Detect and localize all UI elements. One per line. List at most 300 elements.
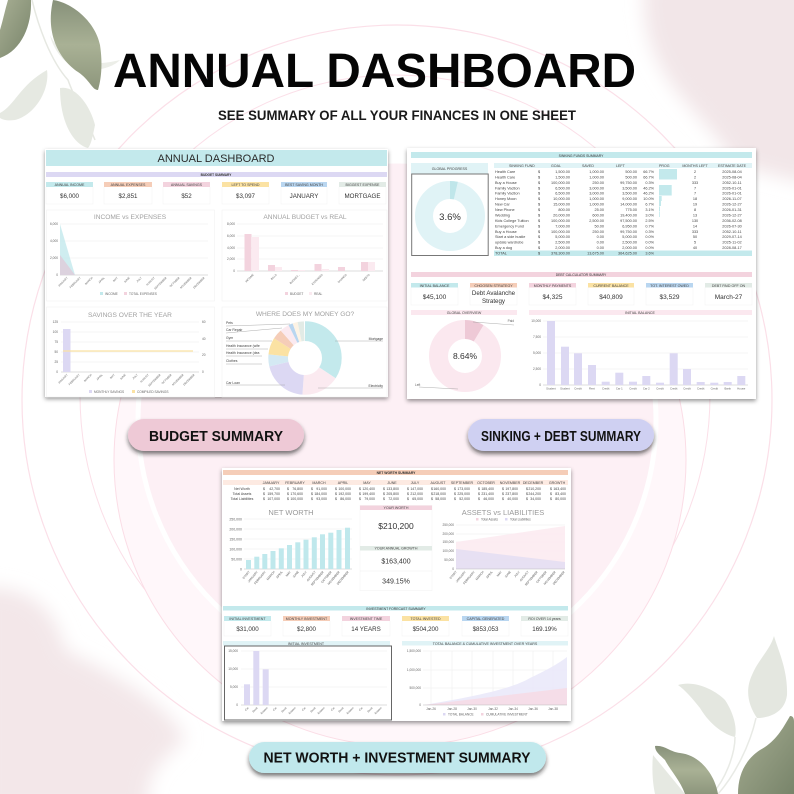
initial balance bar chart: INITIAL BALANCE	[625, 311, 656, 315]
sinking funds table: SINKING FUND	[509, 164, 535, 168]
sinking funds table: 500.00	[625, 170, 637, 174]
net worth table: Total Assets	[233, 492, 252, 496]
chart: net worth: OCTOBER	[320, 569, 333, 584]
sinking funds table: 2026-12-27	[722, 213, 742, 217]
sinking funds table: $	[538, 224, 541, 228]
sinking funds table: Wedding	[495, 213, 510, 217]
net worth table: 225,000	[457, 492, 470, 496]
sinking funds table: 1,000.00	[589, 203, 604, 207]
net worth table: 52,000	[459, 497, 470, 501]
your worth cards	[360, 506, 432, 590]
sinking funds table: LEFT	[616, 164, 626, 168]
chart: income vs expenses	[46, 210, 214, 301]
chart: total balance and cumulative investment: Jan-36	[528, 707, 538, 711]
chart: where does my money go: Pets	[226, 321, 233, 325]
chart: savings over the year: MAY	[109, 373, 116, 380]
sinking funds table: 19	[693, 203, 697, 207]
net worth table: 205,800	[386, 492, 399, 496]
chart: where does my money go: Clothes	[226, 359, 238, 363]
chart: initial investment: Stock	[251, 705, 259, 713]
dashboard heading: ANNUAL DASHBOARD	[158, 153, 275, 165]
sinking funds table: $	[538, 181, 541, 185]
budget summary strip: BUDGET SUMMARY	[201, 173, 232, 177]
chart: net worth: 200,000	[229, 528, 242, 532]
chart: total balance and cumulative investment: 1,500,000	[407, 649, 421, 653]
kpi cards: LEFT TO SPEND	[232, 183, 260, 187]
kpi cards	[46, 182, 386, 204]
net worth table: JULY	[411, 481, 420, 485]
sinking funds table: 18	[693, 197, 697, 201]
sinking funds table: $	[538, 203, 541, 207]
chart: income vs expenses: AUGUST	[145, 276, 156, 287]
sinking funds table: 66.7%	[643, 170, 655, 174]
net worth table: 76,800	[292, 487, 303, 491]
sinking funds table: 7,000.00	[555, 224, 570, 228]
sinking funds table: 2,000.00	[622, 246, 637, 250]
sinking funds table: 40	[693, 246, 697, 250]
net worth table: $$$$$$$$$$$$$	[263, 492, 552, 496]
sinking funds strip	[411, 152, 752, 158]
chart: total balance and cumulative investment: 0	[419, 703, 421, 707]
sinking funds table: $	[538, 197, 541, 201]
initial balance bar chart: 2,500	[533, 367, 541, 371]
net worth table: 83,400	[555, 492, 566, 496]
sinking funds table: $	[538, 175, 541, 179]
sinking funds table: $	[538, 252, 541, 256]
net worth table: OCTOBER	[477, 481, 495, 485]
debt calculator strip: DEBT CALCULATOR SUMMARY	[556, 273, 607, 277]
chart: income vs expenses: JANUARY	[57, 276, 69, 288]
chart: savings over the year: OCTOBER	[161, 373, 173, 385]
sinking funds table: 6,500.00	[555, 186, 570, 190]
sinking funds table: 3.6%	[645, 252, 655, 256]
chart: where does my money go: Car Repair	[226, 328, 243, 332]
initial balance bar chart: Credit	[697, 386, 705, 390]
sinking funds table: 333	[692, 230, 698, 234]
chart: annual budget vs real: INCOME	[244, 273, 255, 283]
chart: total balance and cumulative investment	[402, 641, 568, 716]
sinking funds table: 3,000.00	[589, 186, 604, 190]
initial balance bar chart: Car 2	[643, 386, 650, 390]
sinking funds table: 2,500.00	[622, 241, 637, 245]
kpi cards: $6,000	[60, 193, 80, 200]
sinking funds table: 5,000.00	[555, 235, 570, 239]
chart: income vs expenses: FEBRUARY	[69, 276, 82, 289]
investment kpi cards: MONTHLY INVESTMENT	[286, 617, 328, 621]
net worth strip: NET WORTH SUMMARY	[377, 471, 416, 475]
chart: assets vs liabilities: SEPTEMBER	[524, 569, 539, 587]
chart: assets vs liabilities: Total Liabilities	[510, 518, 531, 522]
sinking funds table: TOTAL	[495, 252, 507, 256]
net worth table: MARCH	[312, 481, 326, 485]
initial balance bar chart: 0	[539, 383, 541, 387]
sinking funds table: 2	[694, 170, 696, 174]
net worth table: 65,000	[412, 497, 423, 501]
sinking funds strip: SINKING FUNDS SUMMARY	[559, 154, 604, 158]
sinking funds table: 500.00	[625, 175, 637, 179]
chart: net worth: 50,000	[231, 558, 242, 562]
chart: savings over the year: 20	[202, 353, 206, 357]
sinking funds table: $	[538, 214, 541, 218]
sinking funds table: 2052-10-11	[722, 230, 742, 234]
investment kpi cards: $504,200	[413, 626, 439, 633]
net worth table: 147,000	[410, 487, 423, 491]
chart: where does my money go: Mortgage	[369, 337, 383, 341]
kpi cards: $52	[181, 193, 192, 200]
net worth table: GROWTH	[549, 481, 566, 485]
debt kpi cards: TOT. INTEREST OWED	[650, 284, 689, 288]
sinking funds table: 25.00	[594, 208, 604, 212]
chart: initial investment: Estates	[317, 705, 326, 715]
net worth table: Net Worth	[234, 487, 250, 491]
net worth table: 80,000	[555, 497, 566, 501]
sinking funds table: 2	[694, 175, 696, 179]
global overview donut: Paid	[508, 319, 514, 323]
chart: income vs expenses: 2,000	[50, 256, 58, 260]
sinking funds table: 100,000.00	[551, 230, 570, 234]
chart: annual budget vs real: SAVINGS	[337, 273, 348, 284]
net worth table: 218,000	[433, 492, 446, 496]
sinking funds table: 46.2%	[643, 192, 655, 196]
sinking funds table: New Phone	[495, 208, 515, 212]
panel: sinking funds and debt	[407, 148, 756, 399]
sinking funds table: 100,000.00	[551, 219, 570, 223]
sinking funds table: 10.0%	[643, 197, 655, 201]
global overview donut: GLOBAL OVERVIEW	[447, 311, 482, 315]
sinking funds table: 13	[693, 213, 697, 217]
chart: total balance and cumulative investment: Jan-28	[447, 707, 457, 711]
chart: savings over the year: SAVINGS OVER THE YEAR	[88, 312, 172, 319]
sinking funds table: 0.3%	[645, 181, 655, 185]
sinking funds table: 5,000.00	[622, 235, 637, 239]
sinking funds table: 364,625.00	[618, 252, 637, 256]
investment kpi cards: INVESTMENT TIME	[350, 617, 383, 621]
sinking funds table: 9,000.00	[622, 197, 637, 201]
sinking funds table: 333	[692, 181, 698, 185]
sinking funds table: 6.7%	[645, 203, 655, 207]
chart: initial investment: Estates	[374, 705, 383, 715]
debt kpi cards: Strategy	[482, 298, 506, 305]
initial balance bar chart: House	[737, 386, 746, 390]
chart: savings over the year: 0	[56, 370, 58, 374]
sinking funds table: 46.2%	[643, 186, 655, 190]
chart: income vs expenses: JUNE	[123, 276, 131, 284]
chart: assets vs liabilities: Total Assets	[481, 518, 498, 522]
your worth cards: YOUR WORTH	[384, 506, 409, 510]
chart: initial investment: Car	[330, 706, 336, 712]
chart: assets vs liabilities: 250,000	[442, 523, 454, 527]
sinking funds table: 10,000.00	[553, 197, 570, 201]
title: ANNUAL DASHBOARD	[113, 45, 636, 98]
net worth table: APRIL	[338, 481, 348, 485]
net worth table: 210,200	[528, 487, 541, 491]
panel: budget summary dashboard	[45, 149, 388, 397]
chart: assets vs liabilities: NOVEMBER	[543, 569, 557, 586]
chart: savings over the year	[46, 307, 214, 397]
chart: assets vs liabilities	[442, 508, 566, 587]
sinking funds table: 2025-08-04	[722, 170, 742, 174]
net worth table: 173,000	[457, 487, 470, 491]
net worth table: 72,000	[388, 497, 399, 501]
chart: assets vs liabilities: APRIL	[485, 570, 494, 579]
chart: savings over the year: 50	[54, 350, 58, 354]
sinking funds table: 2,500.00	[555, 241, 570, 245]
net worth table: 163,400	[553, 487, 566, 491]
net worth table: Total Liabilities	[231, 497, 254, 501]
sinking funds table: Emergency Fund	[495, 224, 524, 228]
chart: net worth: 250,000	[229, 518, 242, 522]
kpi cards: BEST SAVING MONTH	[285, 183, 323, 187]
sinking funds table: 2026-01-01	[722, 186, 742, 190]
chart: annual budget vs real: ANNUAL BUDGET vs REAL	[263, 214, 347, 221]
chart: assets vs liabilities: MARCH	[475, 570, 485, 581]
debt kpi cards: DEBT PAID OFF ON	[712, 284, 746, 288]
investment kpi cards: $2,800	[297, 626, 317, 633]
initial balance bar chart: Credit	[629, 386, 637, 390]
sinking funds table: Kids College Tuition	[495, 219, 529, 223]
global progress donut	[411, 163, 488, 256]
sinking funds table: ESTIMATE DATE	[718, 164, 747, 168]
initial balance bar chart: 5,000	[533, 351, 541, 355]
chart: income vs expenses: 0	[56, 273, 58, 277]
sinking funds table: 2025-08-04	[722, 175, 742, 179]
kpi cards: ANNUAL INCOME	[55, 183, 85, 187]
sinking funds table: 5	[694, 241, 696, 245]
net worth table: NOVEMBER	[500, 481, 521, 485]
sinking funds table: GOAL	[551, 164, 561, 168]
chart: assets vs liabilities: 200,000	[442, 532, 454, 536]
chart: income vs expenses: SEPTEMBER	[153, 276, 168, 290]
chart: savings over the year: 100	[53, 330, 58, 334]
sinking funds table: 378,300.00	[551, 252, 570, 256]
sinking funds table: $	[538, 235, 541, 239]
chart: net worth: MAY	[285, 570, 292, 577]
sinking funds table: 2026-01-31	[722, 208, 742, 212]
sinking funds table: PROG	[659, 164, 670, 168]
sinking funds table: 8	[694, 208, 696, 212]
chart: assets vs liabilities: AUGUST	[519, 570, 530, 582]
chart: total balance and cumulative investment: Jan-34	[508, 707, 518, 711]
chart: savings over the year: 125	[53, 320, 58, 324]
sinking funds table: 250.00	[592, 230, 604, 234]
net worth table: 185,400	[481, 487, 494, 491]
net worth table: 58,000	[435, 497, 446, 501]
investment kpi cards: $31,000	[236, 626, 259, 633]
chart: annual budget vs real: BILLS	[270, 273, 278, 281]
kpi cards: JANUARY	[290, 193, 318, 200]
chart: initial investment: INITIAL INVESTMENT	[288, 642, 325, 646]
debt kpi cards: CHOOSEN STRATEGY	[474, 284, 513, 288]
initial balance bar chart: Credit	[656, 386, 664, 390]
net worth table: FEBRUARY	[285, 481, 305, 485]
net worth table: 192,000	[338, 492, 351, 496]
chart: assets vs liabilities: 100,000	[442, 549, 454, 553]
debt kpi cards: INITIAL BALANCE	[420, 284, 450, 288]
chart: savings over the year: 25	[54, 360, 58, 364]
chart: assets vs liabilities: JULY	[513, 570, 521, 578]
investment kpi cards: 169.19%	[532, 626, 557, 633]
chart: assets vs liabilities: ASSETS vs LIABILITIES	[462, 508, 544, 517]
pill: sinking and debt summary	[468, 419, 654, 451]
chart: initial investment: Estates	[288, 705, 297, 715]
sinking funds table: 19,400.00	[620, 213, 637, 217]
net worth table: SEPTEMBER	[451, 481, 473, 485]
initial balance bar chart: Rent	[589, 386, 595, 390]
sinking funds table: New Car	[495, 203, 511, 207]
sinking funds table: $	[538, 192, 541, 196]
sinking funds table: 2026-12-27	[722, 203, 742, 207]
chart: initial investment: 15,000	[228, 649, 238, 653]
sinking funds table: 0.0%	[645, 241, 655, 245]
sinking funds table: Buy a dog	[495, 246, 512, 250]
chart: total balance and cumulative investment: TOTAL BALANCE	[448, 712, 474, 716]
sinking funds table: 2,000.00	[555, 246, 570, 250]
chart: net worth: 100,000	[229, 548, 242, 552]
chart: total balance and cumulative investment: Jan-30	[467, 707, 477, 711]
sinking funds table: $	[538, 219, 541, 223]
subtitle: SEE SUMMARY OF ALL YOUR FINANCES IN ONE SHEET	[218, 107, 576, 123]
sinking funds table: 0.00	[597, 246, 604, 250]
sinking funds table: Buy a House	[495, 181, 517, 185]
sinking funds table: Family Vaction	[495, 192, 520, 196]
chart: savings over the year: SEPTEMBER	[147, 373, 162, 387]
investment forecast strip: INVESTMENT FORECAST SUMMARY	[366, 607, 426, 611]
sinking funds table: SAVED	[582, 164, 594, 168]
your worth cards: $163,400	[381, 558, 411, 566]
sinking funds table: Start a side hustle	[495, 235, 525, 239]
budget summary strip	[46, 172, 387, 177]
chart: initial investment: Stock	[337, 705, 345, 713]
sinking funds table: 2,500.00	[589, 219, 604, 223]
global overview donut: Left	[415, 383, 420, 387]
initial balance bar chart: Credit	[683, 386, 691, 390]
chart: initial investment: Stock	[366, 705, 374, 713]
pill: sinking and debt summary: SINKING + DEBT SUMMARY	[481, 429, 641, 445]
chart: income vs expenses: OCTOBER	[169, 276, 181, 288]
chart: where does my money go: Health Insurance (wife	[226, 344, 260, 348]
leaves: bottom right	[652, 636, 794, 794]
chart: annual budget vs real: REAL	[314, 292, 323, 296]
chart: income vs expenses: NOVEMBER	[179, 276, 193, 290]
initial balance bar chart: Student	[560, 386, 570, 390]
initial balance bar chart: Credit	[711, 386, 718, 390]
sinking funds table: Health Care	[495, 175, 515, 179]
chart: annual budget vs real: 4,000	[227, 246, 235, 250]
global overview donut	[411, 310, 517, 389]
sinking funds table: 0.7%	[645, 224, 655, 228]
sinking funds table: 2029-07-14	[722, 235, 742, 239]
net worth table: 79,000	[364, 497, 375, 501]
chart: assets vs liabilities: MAY	[496, 570, 503, 577]
chart: initial investment: Stock	[280, 705, 288, 713]
sinking funds table: 99,750.00	[620, 181, 637, 185]
chart: annual budget vs real	[222, 210, 387, 301]
debt kpi cards: $45,100	[423, 294, 447, 301]
chart: net worth: JUNE	[292, 570, 300, 579]
chart: savings over the year: 40	[202, 337, 206, 341]
sinking funds table: 50.00	[594, 224, 604, 228]
sinking funds table: 6,950.00	[622, 224, 637, 228]
chart: net worth: JANUARY	[247, 570, 259, 583]
chart: annual budget vs real: 8,000	[227, 222, 235, 226]
net worth table: 199,400	[362, 492, 375, 496]
net worth table: 107,000	[267, 497, 280, 501]
chart: total balance and cumulative investment: Jan-38	[548, 707, 558, 711]
kpi cards: $2,851	[119, 193, 138, 200]
sinking funds table: Health Care	[495, 170, 515, 174]
net worth table: DECEMBER	[523, 481, 544, 485]
net worth table: 93,000	[316, 497, 327, 501]
chart: net worth: START	[242, 570, 251, 580]
chart: savings over the year: APRIL	[95, 373, 104, 381]
chart: assets vs liabilities: START	[449, 570, 458, 580]
net worth table: 42,700	[269, 487, 280, 491]
investment kpi cards: ROI OVER 14 years	[528, 617, 561, 621]
chart: annual budget vs real: BUDGET	[290, 292, 303, 296]
net worth table: 244,200	[528, 492, 541, 496]
sinking funds table: 0.0%	[645, 246, 655, 250]
sinking funds table: 7	[694, 192, 696, 196]
chart: where does my money go: Health Insurance (dea	[226, 351, 259, 355]
pill: budget summary	[128, 419, 304, 451]
sinking funds table: 50	[693, 235, 697, 239]
chart: savings over the year: 0	[202, 370, 204, 374]
chart: savings over the year: 60	[202, 320, 206, 324]
sinking funds table: 97,500.00	[620, 219, 637, 223]
chart: total balance and cumulative investment: 1,000,000	[407, 668, 421, 672]
global progress donut: 3.6%	[439, 212, 461, 223]
chart: savings over the year: JANUARY	[57, 373, 69, 385]
chart: initial investment: Estates	[260, 705, 269, 715]
debt kpi cards: March-27	[715, 294, 743, 301]
chart: where does my money go: WHERE DOES MY MONEY GO?	[256, 311, 354, 318]
sinking funds table: Buy a House	[495, 230, 517, 234]
chart: assets vs liabilities: DECEMBER	[552, 569, 566, 586]
sinking funds table: 13,675.00	[587, 252, 604, 256]
chart: net worth: APRIL	[275, 570, 284, 579]
sinking funds table: 800.00	[558, 208, 570, 212]
net worth table: 170,600	[290, 492, 303, 496]
chart: net worth: MARCH	[266, 570, 276, 581]
chart: annual budget vs real: 6,000	[227, 234, 235, 238]
chart: annual budget vs real: BUDGET...	[289, 273, 301, 285]
global overview donut: 8.64%	[453, 351, 477, 361]
sinking funds table: 3.1%	[645, 208, 655, 212]
sinking funds table: 66.7%	[643, 175, 655, 179]
sinking funds table: 1,000.00	[589, 175, 604, 179]
pill: net worth and investment summary	[249, 742, 546, 773]
chart: where does my money go: Electricity	[368, 384, 383, 388]
chart: net worth	[229, 508, 352, 587]
sinking funds table: 3,500.00	[622, 192, 637, 196]
net worth table: 133,800	[386, 487, 399, 491]
chart: where does my money go: Gym	[226, 336, 233, 340]
chart: income vs expenses: TOTAL EXPENSES	[129, 292, 157, 296]
leaves: top left	[0, 0, 120, 148]
debt kpi cards: $4,325	[543, 294, 563, 301]
your worth cards: 349.15%	[382, 578, 410, 586]
sinking funds table: 0.3%	[645, 230, 655, 234]
initial balance bar chart: 10,000	[531, 319, 541, 323]
chart: net worth: DECEMBER	[336, 569, 350, 586]
sinking funds table: 3,500.00	[622, 186, 637, 190]
kpi cards: ANNUAL EXPENSES	[111, 183, 146, 187]
chart: total balance and cumulative investment: CUMULATIVE INVESTMENT	[486, 712, 528, 716]
sinking funds table: $	[538, 230, 541, 234]
chart: income vs expenses: MARCH	[84, 276, 94, 286]
chart: initial investment	[223, 641, 392, 720]
sinking funds table	[494, 163, 752, 256]
